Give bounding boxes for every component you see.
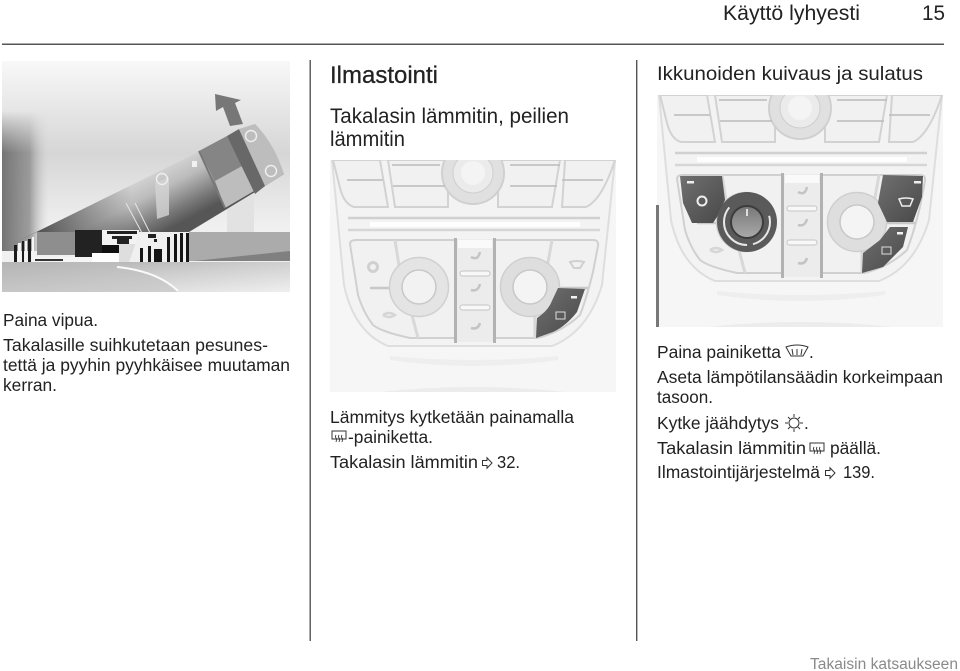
left edge shadow	[656, 205, 659, 327]
stalk markings	[155, 177, 169, 219]
running title: Käyttö lyhyesti	[723, 1, 860, 25]
page header	[723, 1, 945, 25]
page reference: 139.	[843, 462, 875, 482]
step: set temperature	[657, 367, 943, 407]
pale block behind stalk	[227, 211, 254, 232]
stalk collar	[227, 129, 265, 194]
page reference: 32.	[497, 452, 520, 472]
icon: reference arrow	[482, 458, 492, 468]
description	[3, 335, 290, 395]
icon: rear heater	[810, 443, 824, 454]
description: kerran.	[3, 375, 57, 395]
left shadow	[2, 111, 48, 251]
cross reference: Takalasin lämmitin	[330, 452, 478, 472]
highlighted rear heater button	[862, 227, 908, 273]
step: set temperature: Aseta lämpötilansäädin korkeimpaan	[657, 367, 943, 387]
stalk tip	[239, 124, 284, 186]
step: set temperature: tasoon.	[657, 387, 713, 407]
middle column text	[330, 407, 574, 472]
icon: windscreen defrost	[786, 345, 808, 356]
illustration: console with defrost buttons	[656, 77, 943, 327]
page number: 15	[922, 1, 945, 25]
stalk grip	[199, 136, 242, 181]
icon: rear heater	[332, 431, 346, 442]
left column text	[3, 310, 290, 395]
status word: päällä.	[830, 438, 881, 458]
instruction: Lämmitys kytketään painamalla	[330, 407, 574, 427]
sub heading: rear window heater	[330, 105, 569, 151]
right column text	[657, 342, 943, 482]
sub heading: rear window heater: lämmitin	[330, 128, 405, 151]
section heading: Ilmastointi	[330, 62, 438, 89]
icon: cooling snowflake	[785, 414, 803, 432]
description: tettä ja pyyhin pyyhkäisee muutaman	[3, 355, 290, 375]
instruction line: Paina vipua.	[3, 310, 98, 330]
highlighted windscreen button	[878, 175, 923, 222]
right column heading: Ikkunoiden kuivaus ja sulatus	[657, 63, 923, 85]
highlighted rear heater button	[536, 288, 585, 338]
grey block to the right	[189, 232, 290, 261]
full stop: .	[809, 342, 814, 362]
full stop: .	[804, 413, 809, 433]
description: Takalasille suihkutetaan pesunes-	[3, 335, 268, 355]
step: press button: Paina painiketta	[657, 342, 781, 362]
step: cooling: Kytke jäähdytys	[657, 413, 779, 433]
stalk base	[14, 230, 189, 262]
illustration: console with rear heater button	[330, 142, 616, 392]
instruction continued: -painiketta.	[348, 427, 433, 447]
icon: reference arrow	[826, 468, 835, 478]
step: rear heater: Takalasin lämmitin	[657, 438, 806, 458]
stalk body	[16, 147, 284, 242]
highlighted temperature dial	[717, 192, 777, 252]
illustration: wiper stalk	[2, 61, 290, 292]
cross reference: Ilmastointijärjestelmä	[657, 462, 820, 482]
floor	[2, 262, 290, 292]
highlighted cooling button	[680, 176, 725, 223]
sub heading: rear window heater: Takalasin lämmitin, peilien	[330, 105, 569, 128]
arrow	[215, 94, 243, 126]
